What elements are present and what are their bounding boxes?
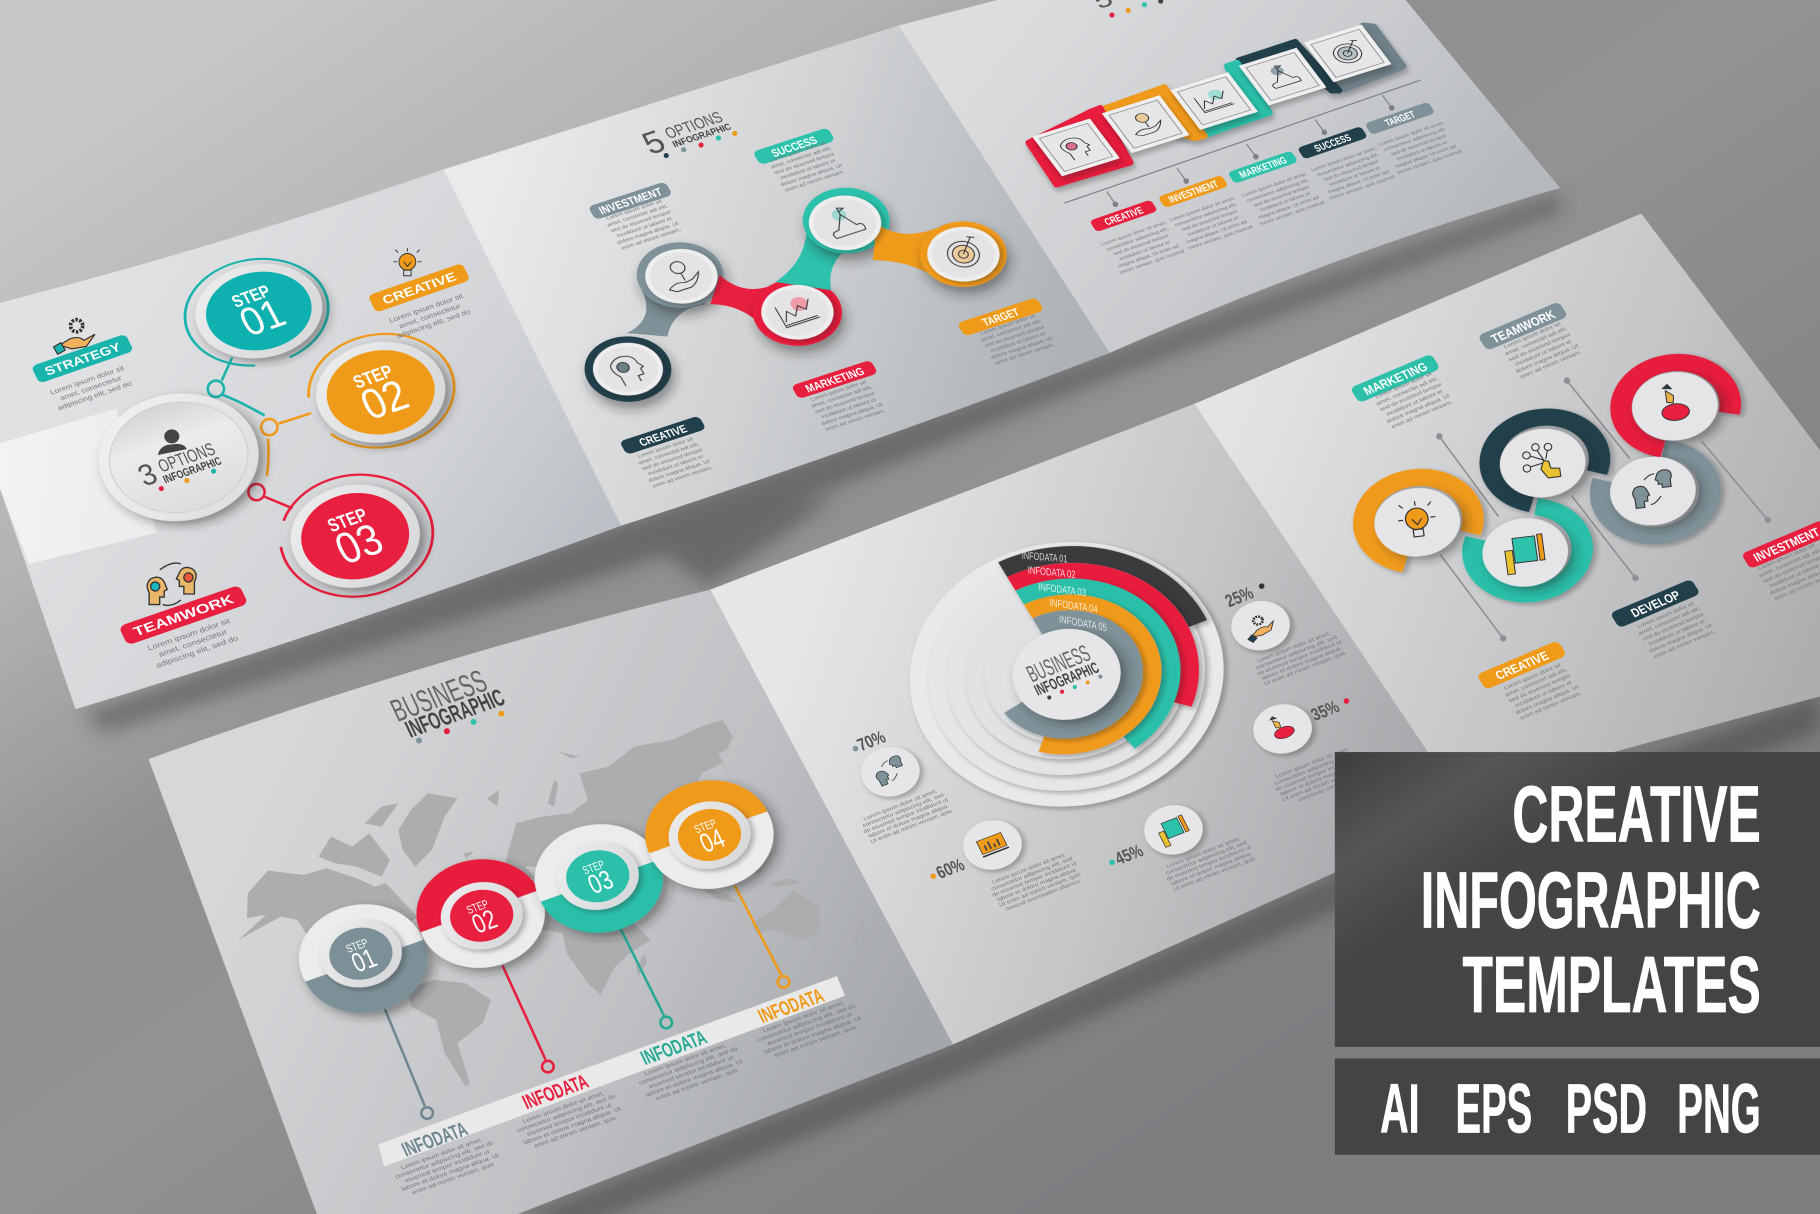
- stat: 35 percent: Ut enim ad minim veniam, quis: [1282, 767, 1365, 803]
- stat: 25 percent: labore et dolore magna aliqua.: [1261, 646, 1344, 682]
- text: marketing description: incididunt ut labore et: [1386, 389, 1444, 417]
- band labels: INFODATA 04: [1050, 597, 1098, 616]
- text: description 3: consectetur adipiscing elit, sed do: [638, 1046, 739, 1087]
- label: marketing: [1227, 150, 1298, 184]
- text: description 1: enim ad minim veniam, quis: [411, 1161, 495, 1196]
- arc: infodata 05: [969, 589, 1166, 759]
- stat: 45 percent: [1109, 797, 1258, 893]
- icon disc: notes: [1468, 506, 1582, 599]
- pin lines: [384, 886, 789, 1119]
- banner: file formats: [1335, 1058, 1820, 1155]
- text: strategy description: amet, consectetur: [58, 374, 123, 402]
- text: description 1: labore et dolore magna aliqua. Ut: [401, 1152, 500, 1193]
- stat: 70 percent: labore et dolore magna aliqua.: [868, 804, 950, 840]
- text: creative description: incididunt ut labore et: [647, 454, 705, 477]
- title: 5 options: [635, 108, 737, 161]
- icon: teamwork heads: [147, 563, 196, 605]
- stat: 25 percent: 25%: [1222, 583, 1257, 611]
- world map: [238, 720, 866, 1087]
- text: success description: enim ad minim veniam,: [784, 169, 846, 193]
- text: teamwork description: sed do eiusmod tempor: [1508, 332, 1572, 363]
- stat: 35 percent: commodo consequat: [1297, 777, 1355, 803]
- text: teamwork description: Lorem ipsum dolor sit: [1503, 321, 1563, 350]
- text: develop description: dolore magna aliqua. Ut: [1648, 623, 1714, 654]
- text: creative description: sed do eiusmod tempor: [1112, 233, 1171, 257]
- title: business infographic: [385, 664, 509, 743]
- label: creative: CREATIVE: [380, 269, 458, 307]
- stat: 35 percent: do eiusmod tempor incididunt ut: [1275, 755, 1362, 793]
- icon disc: heads: [1596, 445, 1710, 537]
- text: marketing description: Lorem ipsum dolor sit amet,: [1241, 172, 1309, 199]
- label: develop: DEVELOP: [1628, 588, 1683, 620]
- label: develop: [1610, 579, 1700, 628]
- text: success description: magna aliqua. Ut enim ad: [1327, 170, 1390, 195]
- title: business infographic: INFOGRAPHIC: [401, 684, 509, 743]
- stat: 60 percent: consectetur adipiscing elit, sed: [990, 856, 1074, 892]
- text: investment description: incididunt ut labore et: [616, 216, 674, 239]
- text: success description: consectetur adipiscing elit,: [1315, 152, 1380, 178]
- heading: infodata grey: INFODATA: [398, 1118, 471, 1161]
- text: investment description: enim ad minim veniam,: [621, 227, 683, 251]
- label: teamwork: TEAMWORK: [1488, 307, 1558, 346]
- text: marketing description: amet, consectet adi elit,: [811, 385, 874, 409]
- label: investment: [1158, 175, 1229, 208]
- stat: 25 percent: do eiusmod tempor incididunt ut: [1256, 640, 1343, 677]
- text: description 4: labore et dolore magna aliqua. Ut: [763, 1015, 863, 1056]
- panel: brochure 2 middle, radial chart: [710, 404, 1468, 1045]
- label: investment: INVESTMENT: [1166, 179, 1221, 205]
- text: teamwork description: adipiscing elit, sed do: [154, 634, 240, 670]
- text: investment description: sed do eiusmod tempor: [610, 210, 673, 234]
- centre title: INFOGRAPHIC: [1031, 658, 1102, 699]
- text: description 2: eiusmod tempor incididunt ut: [526, 1102, 613, 1138]
- text: marketing description: incididunt ut labore et: [820, 397, 878, 420]
- text: teamwork description: enim ad minim veniam,: [1519, 350, 1583, 380]
- label: success: SUCCESS: [1312, 132, 1354, 154]
- stat: 25 percent: Lorem ipsum dolor sit amet,: [1256, 631, 1332, 664]
- icon tiles: [1032, 24, 1391, 176]
- text: investment description: dolore magna aliqua. Ut: [616, 221, 680, 246]
- text: creative description: dolore magna aliqua. Ut: [648, 459, 712, 484]
- step 01: 01: [232, 291, 293, 345]
- step 02 disc: STEP: [464, 897, 491, 917]
- text: creative description: minim veniam, quis nostrud: [1119, 249, 1186, 276]
- icon disc: network touch: [1485, 417, 1600, 509]
- text: success description: dolore magna aliqua. Ut: [780, 163, 844, 188]
- label: creative: CREATIVE: [1492, 648, 1551, 682]
- text: marketing description: enim ad minim veniam,: [825, 408, 887, 432]
- stat: 70 percent: [852, 727, 955, 846]
- text: target description: sed do eiusmod tempor: [1390, 133, 1448, 157]
- text: investment description: sed do eiusmod tempor: [1181, 209, 1239, 233]
- step 03 disc: [516, 808, 681, 949]
- stat: 70 percent: 70%: [854, 727, 889, 755]
- label: target: [957, 297, 1044, 336]
- stat: 70 percent: consectetur adipiscing elit, sed: [862, 793, 945, 829]
- text: success description: sed do eiusmod tempor: [1322, 159, 1381, 183]
- text: strategy description: Lorem ipsum dolor sit: [49, 364, 125, 396]
- text: target description: incididunt ut labore et: [990, 331, 1047, 354]
- text: creative description: adipiscing elit, sed do: [395, 307, 472, 340]
- step 03: [258, 455, 455, 616]
- text: creative description: dolore magna aliqua. Ut: [1515, 685, 1580, 716]
- text: marketing description: magna aliqua. Ut enim ad: [1257, 195, 1320, 220]
- stat: 60 percent: Ut enim ad minim veniam, quis: [998, 872, 1082, 909]
- stat: 70 percent: Lorem ipsum dolor sit amet,: [863, 789, 939, 822]
- text: target description: incididunt ut labore et: [1396, 140, 1449, 162]
- radial bar chart: [861, 499, 1272, 850]
- text: target description: consectetur adipiscing elit,: [1383, 127, 1447, 153]
- step 01 disc: 01: [347, 943, 382, 978]
- text: target description: magna aliqua. Ut enim ad: [1394, 144, 1457, 169]
- text: description 1: consectetur adipiscing elit, sed do: [394, 1140, 495, 1181]
- label: success: SUCCESS: [769, 133, 820, 160]
- label: creative: [619, 416, 706, 455]
- text: marketing description: sed do eiusmod tempor: [1253, 185, 1311, 208]
- text: creative description: Lorem ipsum dolor sit: [387, 292, 464, 325]
- text: description 3: enim ad minim veniam, quis: [655, 1067, 739, 1102]
- arc: infodata 02: [1007, 526, 1223, 745]
- title: 5 options: 5: [635, 123, 672, 161]
- stat: 45 percent: do eiusmod tempor incididunt ut: [1166, 845, 1253, 883]
- title: business infographic: BUSINESS: [385, 664, 492, 729]
- text: creative description: amet, consectetur: [397, 302, 462, 330]
- text: creative description: incididunt ut labore et: [1514, 680, 1573, 709]
- stat: 45 percent: Lorem ipsum dolor sit amet,: [1166, 836, 1242, 870]
- title: 5 options: OPTIONS: [662, 108, 726, 142]
- leader lines: [1436, 377, 1771, 642]
- label: teamwork: [118, 585, 248, 645]
- text: marketing description: incididunt ut labore et: [1259, 191, 1312, 213]
- banner: file formats: EPS: [1456, 1070, 1532, 1148]
- text: creative description: enim ad minim veniam,: [652, 465, 714, 489]
- text: description 4: enim ad minim veniam, quis: [773, 1024, 857, 1059]
- label: marketing: [791, 360, 878, 399]
- arc: infodata 03: [1015, 547, 1214, 761]
- info band: [378, 976, 845, 1166]
- band labels: [1022, 550, 1107, 634]
- stat: 70 percent: Ut enim ad minim veniam, quis: [870, 809, 953, 845]
- step 04 disc: [627, 764, 792, 905]
- step 04 disc: 04: [695, 824, 730, 859]
- step 02 disc: 02: [467, 905, 502, 939]
- stat: 45 percent: Ut enim ad minim veniam, quis: [1173, 856, 1256, 893]
- text: creative description: Lorem ipsum dolor sit: [637, 437, 695, 459]
- step 03: STEP: [324, 504, 371, 536]
- text: teamwork description: Lorem ipsum dolor sit: [146, 617, 232, 652]
- label: teamwork: [1478, 301, 1568, 351]
- step 02: STEP: [350, 362, 396, 393]
- label: marketing: MARKETING: [1237, 155, 1289, 181]
- text: success description: minim veniam, quis nostrud: [1329, 175, 1396, 201]
- label: target: TARGET: [980, 305, 1022, 329]
- band labels: INFODATA 02: [1028, 565, 1075, 581]
- panel: brochure 1 left, three options: [0, 169, 621, 709]
- text: develop description: amet, consectet adi elit,: [1638, 606, 1702, 637]
- text: description 2: enim ad minim veniam, quis: [533, 1115, 617, 1150]
- stat: 35 percent: Lorem ipsum dolor sit amet,: [1275, 747, 1351, 780]
- step 02: [291, 315, 475, 465]
- stat: 60 percent: 60%: [933, 855, 968, 883]
- arc: infodata 04: [974, 568, 1191, 768]
- stat: 60 percent: do eiusmod tempor incididunt ut: [992, 861, 1078, 898]
- text: develop description: incididunt ut labore et: [1648, 619, 1707, 647]
- stat: 25 percent: [1222, 583, 1349, 688]
- text: success description: Lorem ipsum dolor sit amet,: [1310, 146, 1378, 173]
- text: teamwork description: incididunt ut labore et: [1514, 339, 1573, 368]
- text: develop description: Lorem ipsum dolor sit: [1637, 601, 1696, 630]
- text: creative description: amet, consectet adi elit,: [638, 442, 701, 466]
- text: description 1: Lorem ipsum dolor sit amet,: [400, 1137, 484, 1171]
- centre disc: [996, 614, 1137, 735]
- text: description 1: eiusmod tempor incididunt ut: [404, 1148, 491, 1184]
- text: target description: Lorem ipsum dolor sit: [979, 314, 1037, 336]
- text: creative description: consectetur adipiscing elit,: [1105, 227, 1170, 252]
- text: target description: sed do eiusmod tempor: [984, 325, 1046, 349]
- text: marketing description: Lorem ipsum dolor sit: [1374, 371, 1434, 400]
- band labels: INFODATA 05: [1059, 614, 1107, 634]
- stat: 35 percent: consectetur adipiscing elit, sed: [1274, 751, 1357, 787]
- label: strategy: [31, 334, 134, 383]
- label: creative: CREATIVE: [1102, 205, 1146, 228]
- text: strategy description: adipiscing elit, sed do: [56, 379, 133, 412]
- text: investment description: incididunt ut labore et: [1187, 215, 1240, 237]
- banner: file formats: AI: [1380, 1070, 1420, 1148]
- text: develop description: sed do eiusmod tempor: [1641, 612, 1706, 643]
- text: marketing description: Lorem ipsum dolor sit: [810, 380, 868, 403]
- text: investment description: Lorem ipsum dolor sit: [1757, 543, 1817, 572]
- text: marketing description: amet, consectet adi elit,: [1375, 376, 1440, 407]
- stat: 45 percent: consectetur adipiscing elit, sed: [1165, 840, 1248, 877]
- text: teamwork description: amet, consectetur: [157, 628, 229, 659]
- stat: 25 percent: Ut enim ad minim veniam, quis: [1263, 651, 1347, 687]
- serpentine arcs: [1345, 347, 1743, 609]
- heading: infodata teal: INFODATA: [637, 1026, 710, 1069]
- text: creative description: Lorem ipsum dolor sit amet,: [1100, 220, 1168, 247]
- text: target description: amet, consectet adi elit,: [980, 319, 1043, 343]
- centre circle with title: [76, 373, 282, 541]
- stat: 25 percent: consectetur adipiscing elit, sed: [1255, 635, 1338, 671]
- panel: brochure 2 right, serpentine: [1194, 214, 1820, 812]
- text: marketing description: sed do eiusmod tempor: [1379, 382, 1443, 413]
- stat: 70 percent: do eiusmod tempor incididunt ut: [863, 797, 950, 835]
- stat: 35 percent: [1244, 696, 1370, 809]
- text: success description: sed do eiusmod tempor: [773, 152, 836, 176]
- text: marketing description: enim ad minim veniam,: [1391, 400, 1454, 430]
- text: marketing description: dolore magna aliqua. Ut: [1386, 393, 1451, 425]
- text: creative description: sed do eiusmod tempor: [641, 448, 704, 472]
- label: success: [1297, 126, 1368, 159]
- icon disc: bulb: [1360, 476, 1474, 569]
- stat: 45 percent: labore et dolore magna aliqua.: [1171, 851, 1253, 887]
- label: marketing: MARKETING: [1361, 359, 1430, 398]
- text: investment description: magna aliqua. Ut enim ad: [1185, 219, 1249, 245]
- label: investment: INVESTMENT: [596, 185, 665, 217]
- text: success description: incididunt ut labore et: [1328, 165, 1382, 187]
- label: strategy: STRATEGY: [42, 340, 123, 378]
- text: success description: amet, consectet adi elit,: [770, 146, 833, 170]
- icon: gear in hand: [53, 320, 95, 354]
- label: success: [753, 127, 835, 165]
- connector lines: [208, 357, 311, 508]
- text: investment description: Lorem ipsum dolor sit: [606, 199, 664, 221]
- text: target description: Lorem ipsum dolor sit amet,: [1378, 120, 1445, 147]
- text: teamwork description: amet, consectet adi elit,: [1504, 326, 1569, 357]
- text: description 4: consectetur adipiscing elit, sed do: [756, 1003, 858, 1044]
- text: marketing description: consectetur adipiscing elit,: [1246, 178, 1310, 204]
- label: marketing: [1350, 354, 1440, 403]
- text: creative description: sed do eiusmod tempor: [1508, 673, 1572, 704]
- text: target description: dolore magna aliqua. Ut: [990, 336, 1054, 361]
- text: success description: incididunt ut labore et: [780, 158, 837, 181]
- text: marketing description: dolore magna aliqua. Ut: [820, 402, 884, 427]
- panel: brochure 1 middle, five options: [443, 26, 1110, 526]
- centre circle with title: 3: [133, 457, 163, 493]
- step 02 disc: [398, 843, 563, 984]
- label: creative: [1089, 200, 1158, 232]
- heading: infodata red: INFODATA: [519, 1070, 592, 1113]
- step 01: STEP: [228, 282, 274, 312]
- band labels: INFODATA 03: [1038, 582, 1086, 599]
- panel: brochure 1 right, squares timeline: [898, 0, 1560, 353]
- text: marketing description: minim veniam, quis nostrud: [1259, 200, 1326, 227]
- text: description 3: Lorem ipsum dolor sit amet,: [644, 1043, 727, 1077]
- text: target description: minim veniam, quis nostrud: [1396, 149, 1463, 176]
- step 04 disc: STEP: [692, 816, 719, 836]
- stat: 35 percent: 35%: [1308, 697, 1343, 725]
- text: success description: Lorem ipsum dolor sit: [769, 141, 827, 163]
- icon disc: piggy bank: [1618, 360, 1732, 453]
- text: description 3: eiusmod tempor incididunt ut: [648, 1054, 735, 1090]
- stat: 60 percent: Lorem ipsum dolor sit amet,: [992, 852, 1067, 886]
- label: target: TARGET: [1383, 109, 1418, 129]
- text: investment description: consectetur adipiscing elit,: [1174, 202, 1239, 228]
- text: investment description: amet, consectet adi elit,: [606, 204, 670, 228]
- text: creative description: Lorem ipsum dolor sit: [1503, 663, 1563, 691]
- title: 5 options: INFOGRAPHIC: [671, 122, 734, 150]
- band labels: INFODATA 01: [1022, 550, 1067, 565]
- text: creative description: amet, consectet adi elit,: [1504, 667, 1569, 698]
- heading: infodata orange: INFODATA: [754, 984, 828, 1027]
- text: develop description: enim ad minim veniam,: [1653, 630, 1716, 660]
- step 02: 02: [353, 371, 416, 429]
- label: creative: [1476, 640, 1567, 690]
- step 03 disc: STEP: [580, 857, 607, 877]
- step 03 disc: 03: [583, 865, 618, 900]
- stat: 45 percent: 45%: [1112, 841, 1147, 869]
- step 01 disc: STEP: [344, 936, 370, 955]
- label: investment: [588, 182, 673, 220]
- label: creative: [368, 263, 470, 313]
- text: description 2: consectetur adipiscing elit, sed do: [516, 1093, 617, 1134]
- centre circle with title: OPTIONS: [155, 440, 219, 477]
- text: description 2: Lorem ipsum dolor sit amet,: [522, 1090, 605, 1125]
- text: description 2: labore et dolore magna aliqua. Ut: [522, 1106, 622, 1146]
- shadow under bottom brochure: [522, 694, 1820, 1214]
- text: creative description: enim ad minim veniam,: [1519, 691, 1583, 721]
- text: description 4: eiusmod tempor incididunt ut: [766, 1012, 853, 1047]
- text: target description: enim ad minim veniam,: [994, 342, 1056, 366]
- banner: file formats: PSD: [1566, 1070, 1647, 1148]
- timeline line with stems: [1064, 80, 1421, 207]
- chain of five connected circles: [571, 177, 1021, 412]
- text: investment description: minim veniam, quis nostrud: [1187, 224, 1254, 251]
- stat: 35 percent: labore et dolore magna aliqua.: [1279, 761, 1362, 797]
- centre circle with title: INFOGRAPHIC: [161, 454, 224, 486]
- text: marketing description: sed do eiusmod tempor: [814, 391, 877, 415]
- stat: 60 percent: labore et dolore magna aliqua.: [996, 867, 1079, 903]
- label: marketing: MARKETING: [803, 365, 867, 395]
- step 01 disc: [281, 888, 446, 1029]
- label: teamwork: TEAMWORK: [131, 593, 237, 640]
- text: teamwork description: dolore magna aliqua. Ut: [1515, 344, 1580, 375]
- icon: light bulb: [393, 248, 421, 276]
- panel: brochure 2 left, world map steps: [149, 590, 953, 1214]
- shadow under top brochure: [81, 193, 1561, 734]
- centre title: [1022, 639, 1102, 700]
- label: target: [1364, 102, 1435, 135]
- text: investment description: Lorem ipsum dolor sit amet,: [1169, 196, 1237, 223]
- text: creative description: incididunt ut labore et: [1118, 240, 1172, 262]
- arc: infodata 01: [998, 504, 1207, 678]
- stat: 60 percent: nostrud exercitation ullamco: [1005, 879, 1082, 913]
- text: description 3: labore et dolore magna aliqua. Ut: [644, 1058, 744, 1099]
- step 01: [164, 241, 349, 383]
- step 03: 03: [327, 514, 391, 574]
- text: description 4: Lorem ipsum dolor sit amet,: [762, 1000, 846, 1034]
- text: creative description: magna aliqua. Ut enim ad: [1117, 244, 1180, 269]
- centre title: BUSINESS: [1022, 639, 1095, 687]
- stat: 60 percent: [930, 812, 1086, 915]
- banner: creative infographic templates: [1335, 752, 1820, 1047]
- label: creative: CREATIVE: [636, 422, 690, 449]
- coloured backing squares: [1028, 26, 1403, 185]
